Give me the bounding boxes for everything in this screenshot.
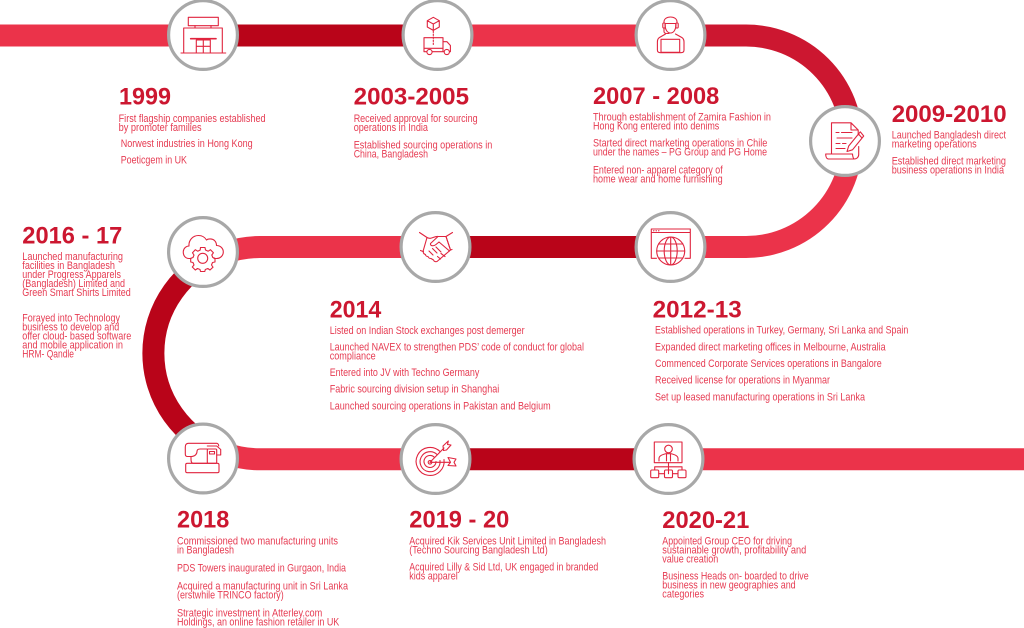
panel: 2009-2010 [892,101,1007,176]
text block: 1999 events: Norwest industries in Hong Kong [121,138,253,150]
text block: 2003-2005 events: Received approval for sourcing [354,113,478,125]
text block: 2012-13 events: Established operations in Turkey, Germany, Sri Lanka and Spain [655,325,908,337]
milestone icon: web globe [636,213,705,281]
timeline ribbon [0,36,1024,459]
heading: 2014: 2014 [330,296,382,323]
milestone icon: organisation chart presenter [634,425,703,493]
text block: 2014 events: Launched NAVEX to strengthen PDS’ code of conduct for global [330,342,584,354]
text block: 2007 - 2008 events: Through establishment of Zamira Fashion in [593,112,771,124]
text block: 1999 events: Poeticgem in UK [121,155,187,167]
milestone icon: cloud with gear [169,218,237,286]
text block: 2019 - 20 events: Acquired Lilly & Sid Ltd, UK engaged in branded [409,561,598,573]
panel: 1999 [119,84,266,167]
heading: 1999: 1999 [119,84,171,110]
panel: 2019 - 20 [409,507,606,582]
text block: 2007 - 2008 events: Hong Kong entered into denims [593,121,719,133]
text block: 2014 events: Fabric sourcing division setup in Shanghai [330,384,499,396]
text block: 2019 - 20 events: (Techno Sourcing Bangladesh Ltd) [409,545,548,557]
text block: 2009-2010 events: Launched Bangladesh direct [892,130,1006,142]
text block: 2016 - 17 events: under Progress Apparels [22,269,121,281]
text block: 2016 - 17 events: offer cloud- based software [22,331,131,343]
panel: 2003-2005 [354,84,492,160]
text block: 2020-21 events: Appointed Group CEO for driving [662,536,792,548]
panel: 2007 - 2008 [593,83,771,186]
text block: 2020-21 events [662,536,809,600]
text block: 2014 events: Launched sourcing operations in Pakistan and Belgium [330,400,551,412]
text block: 2020-21 events: business in new geographies and [662,579,796,591]
text block: 2018 events [177,536,348,628]
milestone icon: signed document [811,107,879,175]
text block: 2018 events: Acquired a manufacturing unit in Sri Lanka [177,580,348,592]
text block: 2020-21 events: sustainable growth, profitability and [662,545,806,557]
text block: 2019 - 20 events [409,536,606,582]
text block: 1999 events [119,113,266,167]
text block: 2016 - 17 events: Green Smart Shirts Limited [22,287,131,299]
panel: 2014 [330,296,584,412]
text block: 2007 - 2008 events: home wear and home furnishing [593,174,723,186]
text block: 2018 events: Strategic investment in Atterley.com [177,607,322,619]
text block: 2009-2010 events [892,130,1006,176]
text block: 2003-2005 events [354,113,492,160]
text block: 2020-21 events: Business Heads on- boarded to drive [662,570,809,582]
text block: 2014 events: Entered into JV with Techno Germany [330,367,480,379]
text block: 1999 events: by promoter families [119,122,202,134]
heading: 2012-13: 2012-13 [653,296,742,323]
text block: 2016 - 17 events: HRM- Qandle [22,349,74,361]
text block: 2007 - 2008 events: under the names – PG Group and PG Home [593,147,767,159]
text block: 2012-13 events: Commenced Corporate Services operations in Bangalore [655,358,882,370]
text block: 2007 - 2008 events: Entered non- apparel category of [593,165,723,177]
panel: 2012-13 [653,296,908,403]
text block: 2016 - 17 events: Forayed into Technology [22,313,121,325]
text block: 2003-2005 events: operations in India [354,122,428,134]
text block: 2016 - 17 events: business to develop and [22,322,119,334]
text block: 2012-13 events: Expanded direct marketing offices in Melbourne, Australia [655,341,886,353]
text block: 2016 - 17 events: (Bangladesh) Limited and [22,278,125,290]
text block: 2007 - 2008 events: Started direct marketing operations in Chile [593,138,767,150]
text block: 2018 events: PDS Towers inaugurated in Gurgaon, India [177,563,346,575]
milestone icon: delivery truck [403,1,472,69]
text block: 2014 events: Listed on Indian Stock exchanges post demerger [330,325,525,337]
panel: 2016 - 17 [22,223,131,361]
text block: 2019 - 20 events: Acquired Kik Services Unit Limited in Bangladesh [409,536,606,548]
heading: 2019 - 20: 2019 - 20 [409,507,509,534]
text block: 2016 - 17 events [22,251,131,361]
text block: 2018 events: Commissioned two manufacturing units [177,536,338,548]
text block: 2009-2010 events: marketing operations [892,139,977,151]
text block: 2018 events: Holdings, an online fashion retailer in UK [177,616,339,628]
text block: 2014 events [330,325,584,412]
text block: 2018 events: in Bangladesh [177,545,234,557]
text block: 1999 events: First flagship companies established [119,113,266,125]
milestone icon: storefront [169,1,237,69]
text block: 2018 events: (erstwhile TRINCO factory) [177,589,284,601]
text block: 2016 - 17 events: facilities in Bangladesh [22,260,115,272]
heading: 2016 - 17: 2016 - 17 [22,223,122,250]
text block: 2020-21 events: categories [662,588,704,600]
text block: 2020-21 events: value creation [662,554,718,566]
panel: 2018 [177,507,348,628]
text block: 2012-13 events [655,325,908,403]
milestone icon: target with arrows [401,425,470,493]
milestone icon: handshake [401,213,470,281]
text block: 2014 events: compliance [330,351,376,363]
text block: 2009-2010 events: business operations in India [892,164,1004,176]
text block: 2012-13 events: Set up leased manufacturing operations in Sri Lanka [655,391,865,403]
heading: 2018: 2018 [177,507,229,534]
heading: 2020-21: 2020-21 [662,507,749,534]
text block: 2016 - 17 events: and mobile application in [22,340,123,352]
text block: 2012-13 events: Received license for operations in Myanmar [655,375,830,387]
text block: 2003-2005 events: Established sourcing operations in [354,139,492,151]
milestone icon: sewing machine [169,424,237,493]
text block: 2009-2010 events: Established direct marketing [892,155,1006,167]
text block: 2019 - 20 events: kids apparel [409,570,458,582]
heading: 2009-2010: 2009-2010 [892,101,1007,128]
milestone icon: headset operator [636,1,705,69]
text block: 2003-2005 events: China, Bangladesh [354,148,428,160]
text block: 2007 - 2008 events [593,112,771,186]
heading: 2003-2005: 2003-2005 [354,84,469,110]
panel: 2020-21 [662,507,809,600]
text block: 2016 - 17 events: Launched manufacturing [22,251,123,263]
heading: 2007 - 2008: 2007 - 2008 [593,83,719,110]
